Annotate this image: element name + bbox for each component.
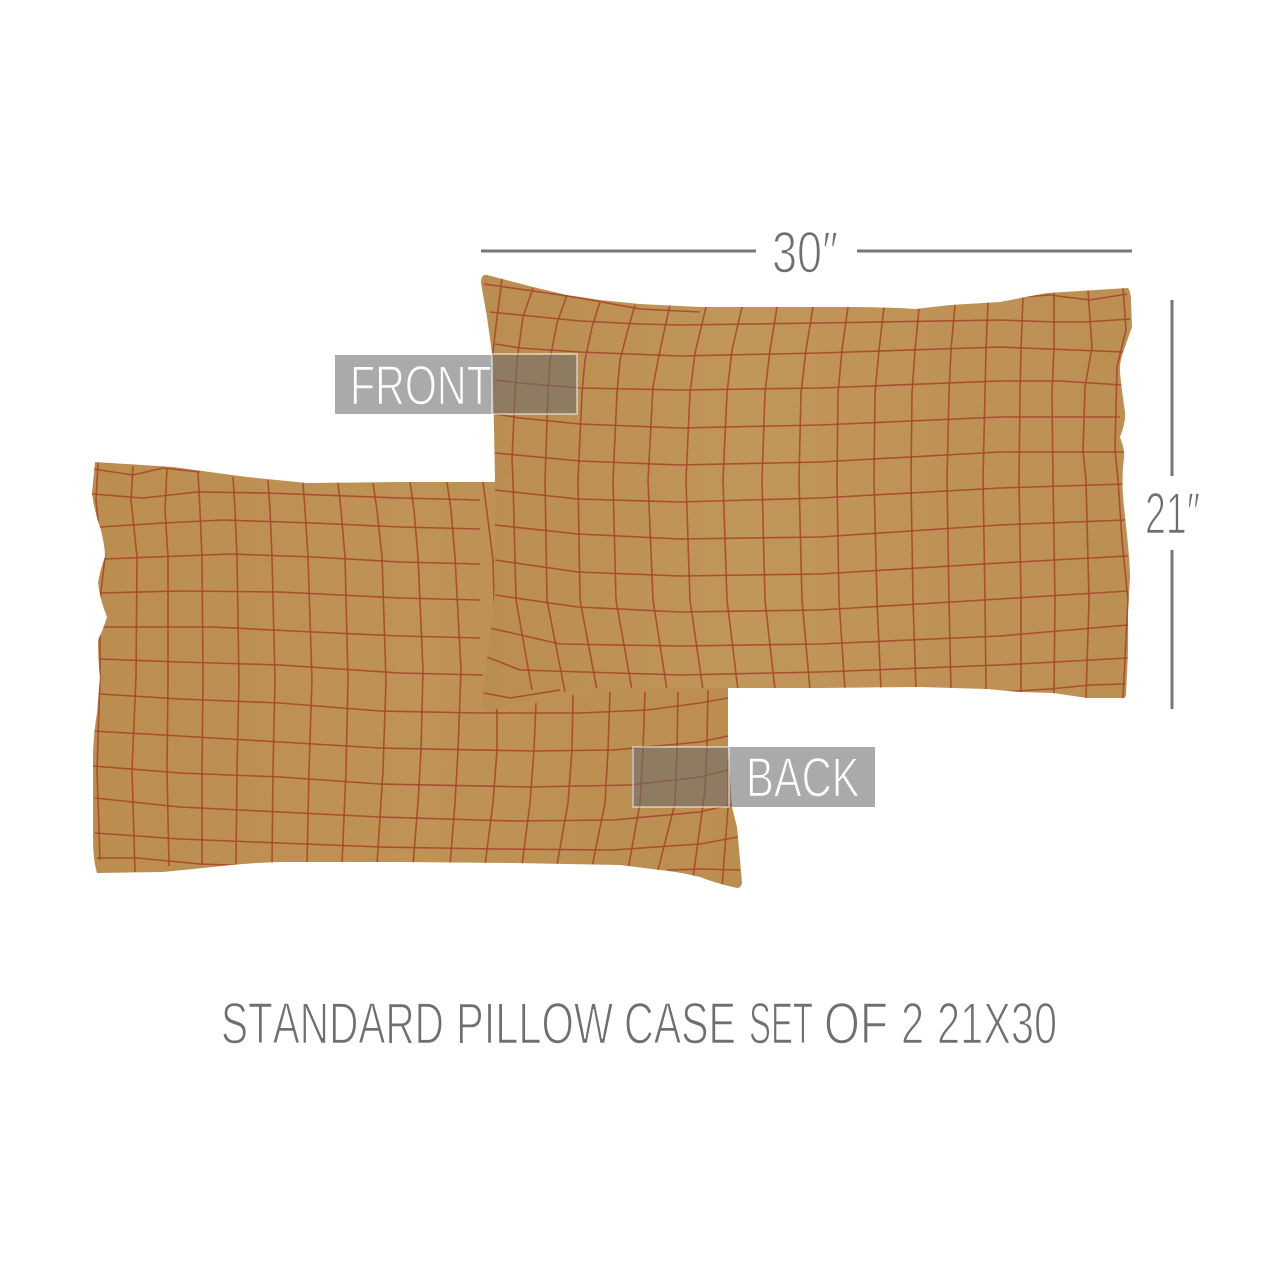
product caption: 21X30 <box>937 991 1057 1056</box>
front pillow <box>481 275 1132 712</box>
back label: BACK <box>746 747 860 809</box>
product caption: PILLOW <box>456 991 613 1056</box>
height label 21 inches: 21″ <box>1145 482 1200 546</box>
product caption: CASE <box>624 990 736 1056</box>
product caption: SET <box>749 991 813 1056</box>
back label <box>632 747 875 809</box>
width label 30 inches: 30″ <box>772 220 838 286</box>
infographic canvas <box>92 232 1199 1044</box>
front label: FRONT <box>350 356 492 417</box>
product caption <box>221 990 1057 1057</box>
width dimension line <box>481 250 1132 252</box>
product caption: 2 <box>901 991 924 1056</box>
height dimension line <box>1170 300 1174 709</box>
front label <box>335 354 577 417</box>
back pillow <box>92 462 742 888</box>
product caption: OF <box>824 993 888 1057</box>
product caption: STANDARD <box>221 991 444 1056</box>
